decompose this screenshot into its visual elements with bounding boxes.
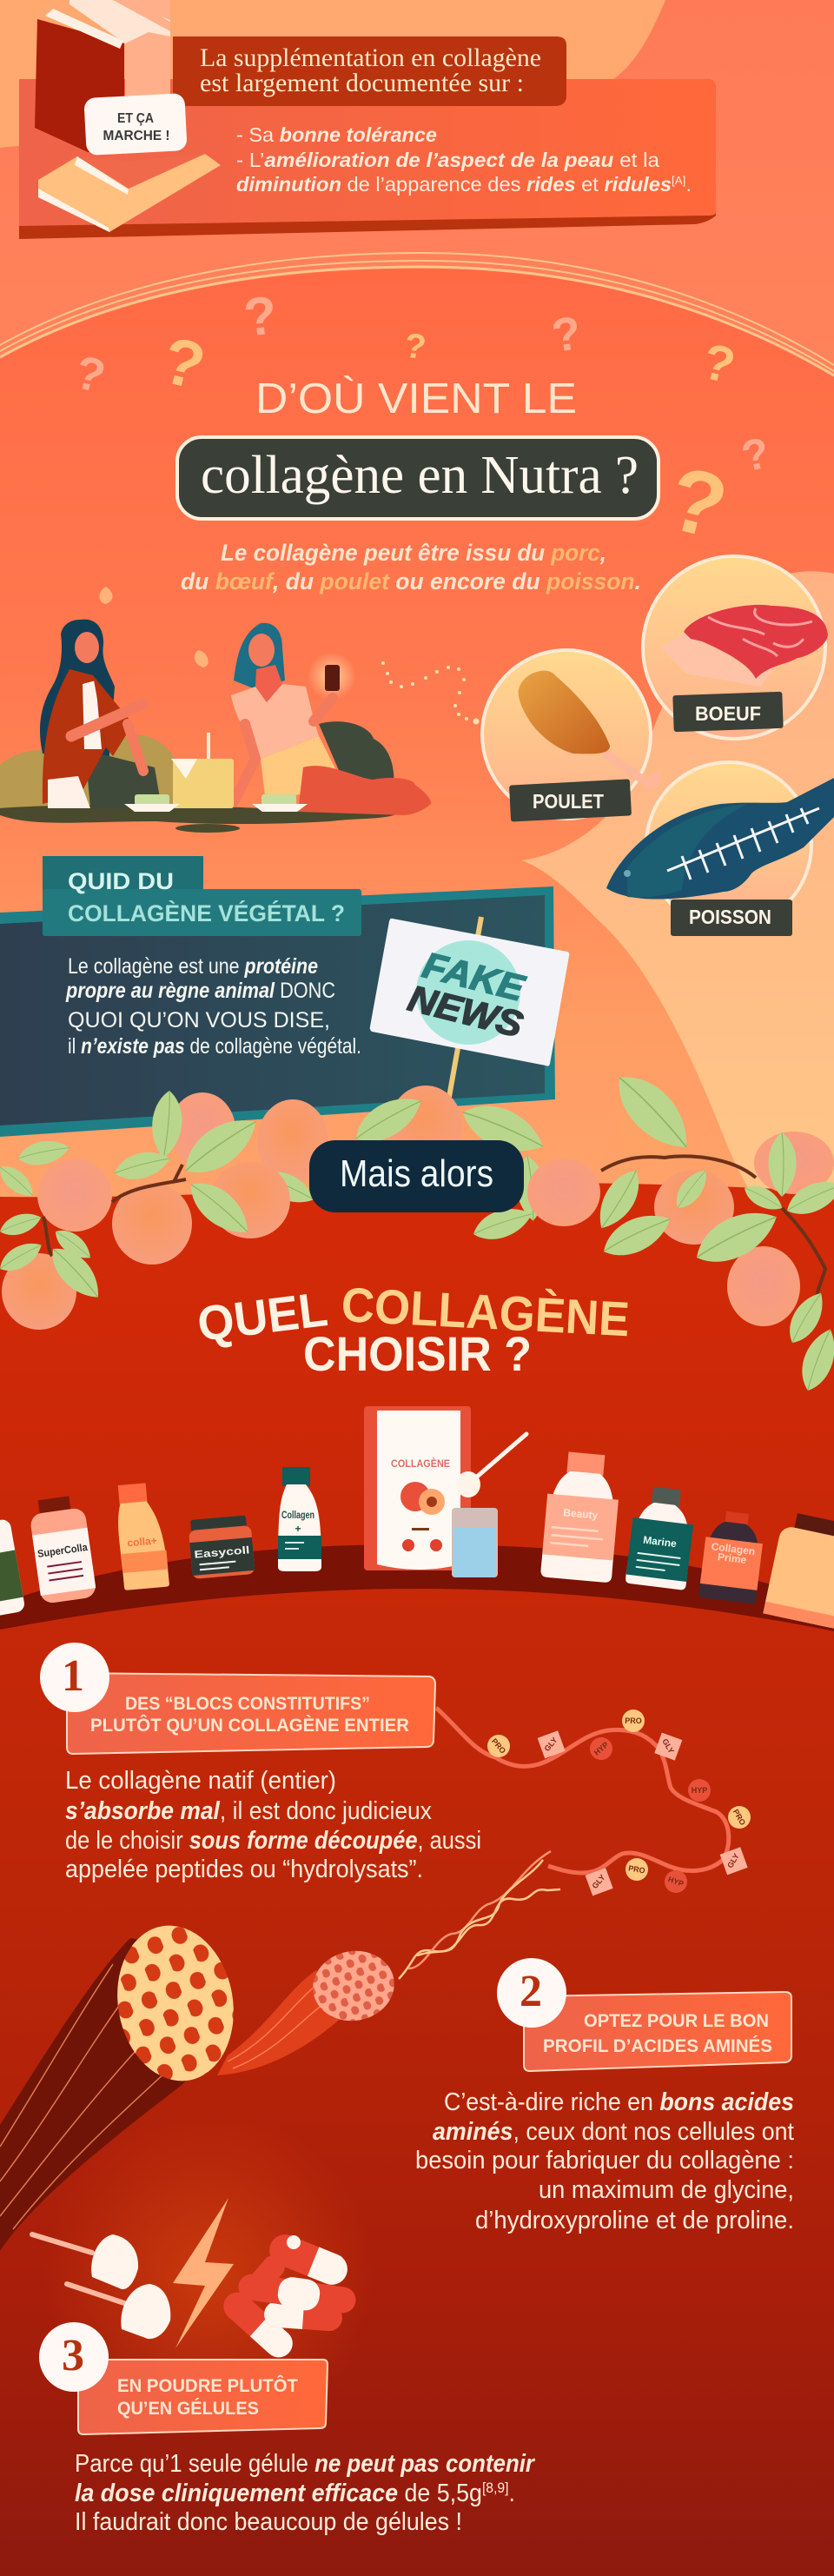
button: mais alors: [309, 1140, 524, 1212]
bottle: left partial: [0, 1518, 26, 1618]
floating peach leaves: [99, 587, 208, 667]
body text: de le choisir sous forme découpée, aussi: [65, 1827, 481, 1855]
number badge 3: 3: [62, 2331, 84, 2380]
large section: [105, 1916, 246, 2090]
panel: documented supplementation: [19, 0, 716, 239]
header text: DES “BLOCS CONSTITUTIFS”: [125, 1694, 370, 1714]
body text: Le collagène est une protéine: [68, 954, 318, 979]
number badge 3: [39, 2322, 109, 2392]
bottle: Collagen +: Collagen: [281, 1509, 314, 1521]
body text: propre au règne animal DONC: [65, 979, 335, 1003]
heading: quel collagène choisir: COLLAGÈNE: [340, 1277, 631, 1346]
label poulet: POULET: [533, 790, 604, 813]
icon: boeuf: [643, 556, 828, 739]
pouch: collagène: [364, 1406, 471, 1570]
section 3: en poudre: [39, 2322, 536, 2536]
spoon: [456, 1434, 526, 1497]
bottle: colla+: colla+: [127, 1535, 157, 1549]
sign: fake news: NEWS: [404, 977, 527, 1045]
tags: PRO: [628, 1863, 645, 1876]
bottle: SuperColla: [28, 1494, 97, 1604]
heading: quel collagène choisir: CHOISIR ?: [303, 1326, 532, 1381]
tab collagène végétal: [43, 889, 361, 936]
tags: [487, 1710, 751, 1895]
bottle: Beauty: [540, 1451, 622, 1583]
number badge 1: 1: [62, 1651, 84, 1701]
body text: Il faudrait donc beaucoup de gélules !: [75, 2508, 462, 2536]
bottle: Collagen +: +: [295, 1523, 301, 1535]
header text: PROFIL D’ACIDES AMINÉS: [543, 2036, 772, 2056]
bullet text: .: [685, 173, 692, 196]
section 1: blocs constitutifs: [40, 1643, 481, 1883]
icons: question marks: ?: [738, 428, 773, 481]
body text: besoin pour fabriquer du collagène :: [415, 2147, 794, 2174]
leaves back: [0, 1063, 702, 1240]
number badge 2: [497, 1958, 566, 2028]
bottle: Collagen +: [278, 1467, 321, 1571]
icon: poulet: [482, 650, 660, 822]
header box: [524, 1992, 791, 2071]
heading: quel collagène choisir: QUEL: [195, 1281, 330, 1351]
heading: collagène en Nutra: [177, 437, 659, 519]
dotted trail: [381, 661, 480, 725]
body text: [415, 2088, 794, 2234]
drumstick: [601, 749, 660, 789]
number badge 2: 2: [520, 1967, 542, 2016]
tags: HYP: [667, 1875, 685, 1889]
tags: GLY: [590, 1873, 607, 1890]
bottle: Marine: [625, 1484, 698, 1590]
amino acid chain: [436, 1708, 751, 1895]
icons: question marks: ?: [156, 323, 212, 404]
icons: question marks: ?: [70, 346, 110, 403]
heading tab: [173, 37, 566, 106]
header text: [543, 2011, 772, 2056]
heading: quel collagène choisir: [195, 1277, 631, 1381]
tags: GLY: [725, 1852, 741, 1869]
branches: [43, 1156, 825, 1295]
icon: books: [35, 0, 221, 232]
illustration: collagen fibres: [0, 1851, 560, 2251]
bullet text: [236, 123, 692, 196]
icons: question marks: ?: [241, 285, 280, 349]
header text: OPTEZ POUR LE BON: [584, 2011, 769, 2031]
bottle: Collagen Prime: Collagen: [711, 1540, 756, 1557]
meat: [660, 627, 773, 687]
background: top peach shape: [0, 0, 665, 148]
sign: fake news: [370, 917, 569, 1097]
body text: Parce qu’1 seule gélule ne peut pas contenir: [75, 2450, 536, 2478]
tab quid du: [43, 856, 203, 891]
heading tab: La supplémentation en collagène: [200, 43, 541, 72]
tags: PRO: [490, 1736, 507, 1756]
label poulet: [509, 779, 632, 822]
picnic ground: [0, 805, 409, 824]
body text: appelée peptides ou “hydrolysats”.: [65, 1856, 423, 1883]
leaves front: [0, 1106, 834, 1395]
bullet text: - Sa bonne tolérance: [236, 123, 437, 146]
heading: COLLAGÈNE VÉGÉTAL ?: [68, 900, 345, 926]
icon: poisson: [606, 762, 834, 936]
header text: [90, 1694, 409, 1736]
text: sources of collagen: Le collagène peut être issu du porc,: [221, 540, 606, 566]
bottle: Marine: Marine: [642, 1534, 678, 1550]
body text: C’est-à-dire riche en bons acides: [444, 2088, 794, 2116]
tags: GLY: [660, 1737, 676, 1755]
lightning: [173, 2198, 234, 2348]
icons: question marks: ?: [548, 307, 585, 362]
bullet text: [A]: [672, 174, 685, 187]
header text: QU’EN GÉLULES: [117, 2399, 259, 2419]
body text: [8,9]: [482, 2480, 509, 2496]
bottle: colla+: [115, 1482, 169, 1590]
background: arch lines: [0, 253, 834, 375]
pouch: collagène: COLLAGÈNE: [391, 1457, 450, 1470]
hair pile: [319, 721, 394, 787]
fish: [606, 778, 834, 900]
cushion: [298, 766, 431, 815]
callout: et ça marche: MARCHE !: [103, 129, 170, 143]
heading: d'où vient le: D’OÙ VIENT LE: [255, 375, 577, 422]
woman left: [40, 620, 162, 808]
header text: [117, 2375, 298, 2419]
shelf: [0, 1544, 834, 1631]
background: red zone: [0, 1182, 834, 2576]
icons: question marks: ?: [659, 448, 737, 559]
jar: Easycoll: Easycoll: [194, 1544, 250, 1561]
label boeuf: BOEUF: [695, 702, 761, 725]
body text: s’absorbe mal, il est donc judicieux: [65, 1797, 432, 1825]
label poisson: POISSON: [689, 906, 771, 928]
jar: Easycoll: [188, 1515, 255, 1579]
peaches back: [619, 1100, 685, 1163]
section 2: profil d'acides aminés: [415, 1958, 794, 2234]
sign: fake news: FAKE: [419, 944, 530, 1009]
body text: aminés, ceux dont nos cellules ont: [433, 2118, 794, 2146]
body text: QUOI QU’ON VOUS DISE,: [68, 1008, 330, 1032]
small section: [308, 1944, 400, 2028]
tags: HYP: [592, 1740, 610, 1757]
peaches front: [210, 1162, 290, 1238]
dark fibre: [0, 1938, 226, 2251]
scoops: [32, 2234, 170, 2339]
heading: QUID DU: [68, 868, 174, 894]
heading: collagène en Nutra: collagène en Nutra ?: [201, 446, 639, 505]
background: arch zone: [0, 269, 834, 1217]
header text: EN POUDRE PLUTÔT: [117, 2375, 298, 2396]
tags: HYP: [692, 1786, 707, 1795]
illustration: two women picnic: [0, 587, 431, 833]
body text: [65, 1767, 481, 1883]
body text: la dose cliniquement efficace de 5,5g: [75, 2480, 489, 2507]
tags: PRO: [625, 1716, 642, 1725]
background: coral top: [0, 0, 834, 1217]
products row: [0, 1406, 834, 1630]
header box: [67, 1673, 435, 1754]
text: sources of collagen: du bœuf, du poulet ou encore du poisson.: [181, 568, 641, 594]
cake: [171, 733, 234, 808]
plates: [124, 794, 308, 812]
header text: PLUTÔT QU’UN COLLAGÈNE ENTIER: [90, 1715, 409, 1736]
bottle: Beauty: Beauty: [563, 1506, 599, 1522]
callout: et ça marche: ET ÇA: [117, 111, 154, 126]
body text: .: [509, 2480, 515, 2507]
illustration: scoops vs capsules: [32, 2198, 358, 2363]
heading tab: est largement documentée sur :: [200, 69, 524, 97]
body text: il n’existe pas de collagène végétal.: [68, 1034, 361, 1059]
bullet text: diminution de l’apparence des rides et ridules: [236, 173, 670, 196]
panel base: [19, 79, 716, 239]
icons: question marks: [70, 285, 773, 559]
bottle: right partial: [763, 1510, 834, 1630]
board border: [0, 886, 555, 1137]
bottle: Collagen Prime: Prime: [717, 1550, 747, 1566]
body text: Le collagène natif (entier): [65, 1767, 336, 1795]
body text: un maximum de glycine,: [539, 2176, 794, 2204]
background: peach blob right: [521, 571, 834, 1258]
glow behind capsules: [43, 2112, 374, 2442]
button: mais alors: Mais alors: [340, 1152, 493, 1195]
body text: d’hydroxyproline et de proline.: [475, 2207, 794, 2234]
heading: [68, 868, 345, 926]
bullet text: - L’amélioration de l’aspect de la peau et la: [236, 149, 659, 171]
bottle: Collagen Prime: [698, 1509, 766, 1604]
icons: question marks: ?: [697, 333, 740, 395]
bush: [0, 735, 182, 813]
body text: [65, 954, 361, 1059]
board: [0, 895, 545, 1125]
panel: collagène végétal: [0, 856, 569, 1137]
bottle: SuperColla: SuperColla: [36, 1541, 89, 1560]
label boeuf: [672, 692, 784, 732]
tags: PRO: [731, 1808, 747, 1827]
text: sources of collagen: [181, 540, 641, 594]
medium fibre: [217, 1970, 343, 2075]
number badge 1: [40, 1643, 109, 1712]
icons: question marks: ?: [402, 327, 428, 367]
woman right: [231, 623, 356, 804]
label poisson: [671, 900, 792, 936]
illustration: peach branches: [0, 1063, 834, 1395]
helix: [399, 1851, 560, 1979]
glass: [452, 1508, 498, 1577]
body text: [75, 2450, 536, 2536]
tags: GLY: [542, 1736, 559, 1753]
header box: [78, 2360, 328, 2434]
callout: et ça marche: [83, 93, 188, 156]
capsules: [218, 2230, 358, 2363]
